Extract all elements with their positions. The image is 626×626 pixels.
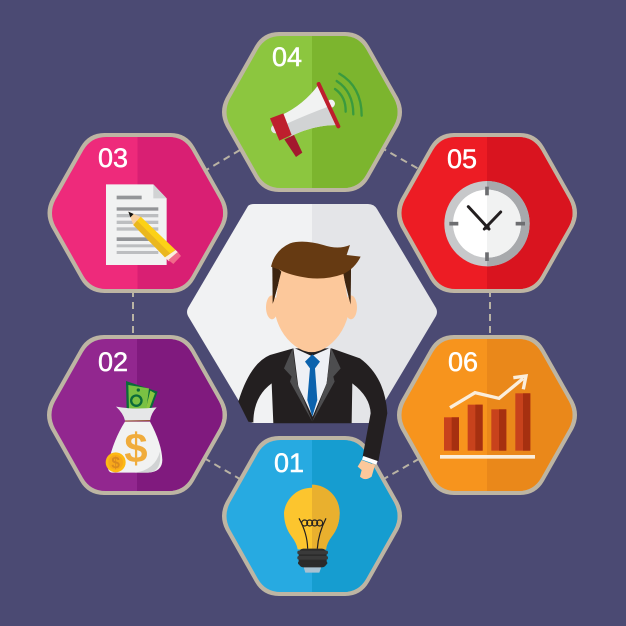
icon: money bag with coin: [106, 381, 162, 473]
hexagon 06: [397, 335, 577, 495]
ears: [266, 295, 357, 319]
number 02: 02: [98, 347, 128, 377]
icon: document and pencil: [106, 184, 181, 265]
hexagon 02: [47, 335, 227, 495]
panel: 05 clock: [397, 133, 577, 293]
businessman: [238, 242, 387, 479]
hexagon 01: [222, 436, 402, 596]
number 01: 01: [274, 448, 304, 478]
number 03: 03: [98, 143, 128, 173]
face: [274, 268, 349, 352]
central white hexagon: [187, 204, 437, 423]
left lapel: [284, 348, 312, 422]
cuff: [362, 456, 378, 465]
icon: money bag with coin: $: [111, 455, 120, 472]
right lapel: [312, 348, 341, 422]
side hair: [272, 265, 351, 305]
icon: megaphone: [270, 74, 362, 157]
hair: [271, 242, 361, 278]
icon: clock: [444, 181, 530, 266]
panel: 06 growth chart: [397, 335, 577, 495]
tie: [305, 354, 320, 417]
panel: 03 document: [48, 133, 228, 293]
icon: bar chart with arrow: [440, 376, 535, 459]
number 05: 05: [447, 144, 477, 174]
icon: money bag with coin: $: [124, 425, 148, 472]
hexagon 03: [48, 133, 228, 293]
hand: [358, 460, 375, 479]
hexagon 04: [222, 32, 402, 192]
panel: 02 money bag: [47, 335, 227, 495]
shirt: [293, 348, 331, 417]
icon: light bulb: [284, 485, 340, 573]
suit: [238, 348, 387, 462]
number 04: 04: [272, 42, 302, 72]
panel: 04 megaphone: [222, 32, 402, 192]
panel: 01 light bulb: [222, 436, 402, 596]
hexagon 05: [397, 133, 577, 293]
number 06: 06: [448, 347, 478, 377]
side hair overlay: [272, 265, 351, 303]
